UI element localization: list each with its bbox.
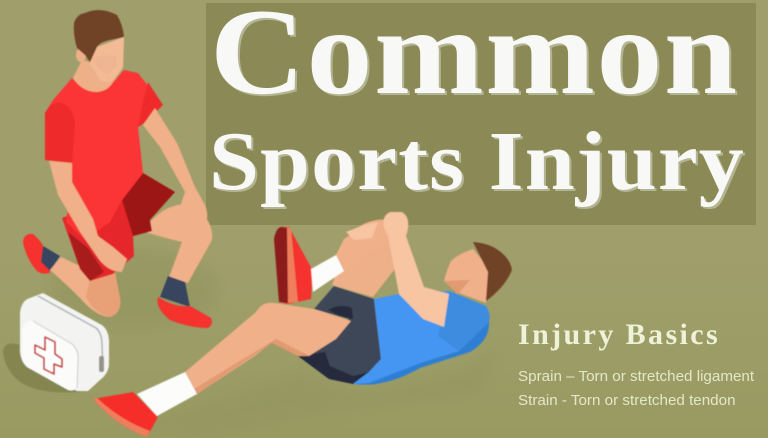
sprain definition: Sprain – Torn or stretched ligament: [518, 368, 754, 385]
medic head: [73, 10, 124, 92]
medic near arm: [49, 161, 127, 272]
arm holding knee: [346, 212, 449, 327]
medic shorts: [62, 173, 175, 281]
strain definition: Strain - Torn or stretched tendon: [518, 392, 736, 409]
medic far shoe and sock: [23, 234, 60, 274]
medic shirt: [45, 70, 163, 240]
title: Sports Injury: Sports Injury: [209, 115, 745, 208]
medic figure: [23, 10, 212, 328]
straight leg and foot: [93, 303, 351, 437]
first aid kit: [3, 293, 109, 393]
blue shirt: [353, 291, 490, 385]
head: [444, 242, 512, 303]
icon: red cross: [35, 337, 62, 374]
title panel: [206, 3, 756, 225]
injured player: [93, 212, 512, 437]
raised leg: [311, 220, 403, 297]
medic front leg: [145, 204, 212, 328]
injury basics text block: [518, 318, 754, 409]
medic kneeling leg: [50, 257, 120, 317]
heading: Injury Basics: Injury Basics: [518, 318, 720, 351]
shorts: [298, 286, 381, 384]
ground shading: [50, 248, 498, 436]
medic far arm and hand: [143, 108, 207, 230]
raised shoe: [274, 227, 313, 304]
